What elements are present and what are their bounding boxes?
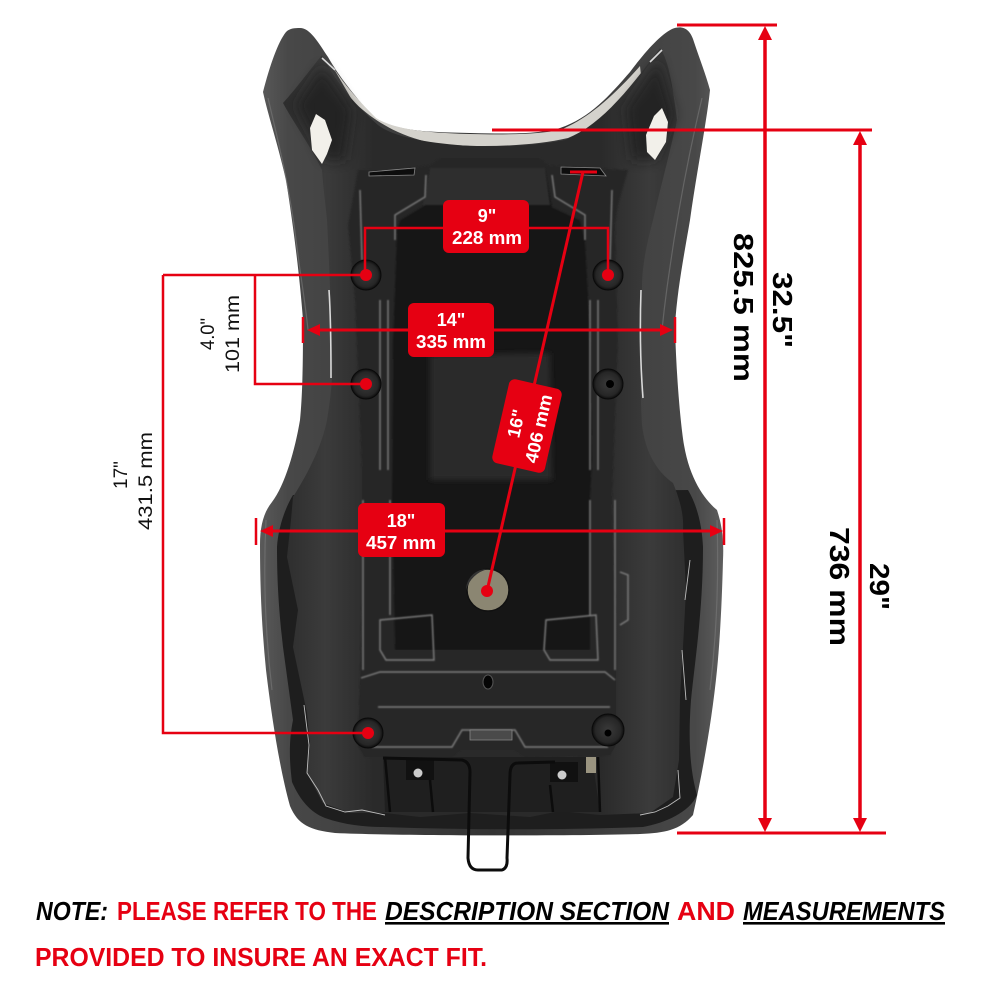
dimension: 4 in left mounting: 4.0" <box>198 318 219 350</box>
foam strip <box>330 62 642 146</box>
small hole <box>483 675 493 689</box>
dimension: 16 in diagonal <box>481 172 597 597</box>
dimension: overall length 32.5 in <box>677 25 798 833</box>
seat photo <box>260 27 723 870</box>
dimension: 18 in seat width: 457 mm <box>366 533 436 553</box>
dimension: overall length 32.5 in: 825.5 mm <box>728 233 759 382</box>
white edge streaks <box>322 50 662 398</box>
bottom brackets <box>383 757 600 812</box>
fit note: AND <box>677 896 735 926</box>
fit note <box>35 896 946 972</box>
dimension: 17 in left mounting <box>111 275 374 739</box>
centre hole <box>467 569 509 611</box>
vinyl wrinkled band <box>277 490 703 829</box>
wire handle <box>383 758 555 870</box>
fit note: NOTE: <box>36 896 108 926</box>
top slots <box>369 167 606 740</box>
dimension: 16 in diagonal: 406 mm <box>521 392 556 465</box>
dimension: 18 in seat width <box>256 503 724 557</box>
seat inner vinyl <box>283 48 686 817</box>
foam cutouts <box>310 108 668 164</box>
dimension: length 29 in: 736 mm <box>824 527 855 646</box>
dimension: length 29 in: 29" <box>864 563 895 610</box>
dimension: 14 in waist width: 14" <box>437 310 465 330</box>
pan recess <box>430 353 552 480</box>
upper wing shading <box>296 60 674 160</box>
dimension: 17 in left mounting: 431.5 mm <box>136 432 157 530</box>
pan lower plate <box>358 650 616 757</box>
seat outer rim <box>260 27 723 835</box>
fit note: DESCRIPTION SECTION <box>385 896 670 926</box>
fit note: MEASUREMENTS <box>743 896 946 926</box>
pan centre <box>392 170 592 650</box>
pan ridges <box>360 175 628 747</box>
dimension: 4 in left mounting <box>198 269 372 390</box>
dimension: 4 in left mounting: 101 mm <box>223 295 244 373</box>
dimension: 17 in left mounting: 17" <box>111 461 132 489</box>
plastic seat pan <box>348 158 628 757</box>
dimension: 18 in seat width: 18" <box>387 511 415 531</box>
dimension: overall length 32.5 in: 32.5" <box>767 272 798 348</box>
dimension: 16 in diagonal: 16" <box>503 407 529 440</box>
dimension: 9 in mount spacing <box>365 200 614 281</box>
dimension: 9 in mount spacing: 9" <box>478 206 496 226</box>
dimension: 9 in mount spacing: 228 mm <box>452 228 522 248</box>
wrinkled vinyl highlights <box>304 560 690 815</box>
dimension: 14 in waist width: 335 mm <box>416 332 486 352</box>
dimension: length 29 in <box>492 130 895 833</box>
grommets <box>351 260 624 748</box>
fit note: PROVIDED TO INSURE AN EXACT FIT. <box>35 942 487 972</box>
rim highlights <box>265 98 718 690</box>
fit note: PLEASE REFER TO THE <box>117 896 377 926</box>
dimension: 14 in waist width <box>303 303 675 357</box>
